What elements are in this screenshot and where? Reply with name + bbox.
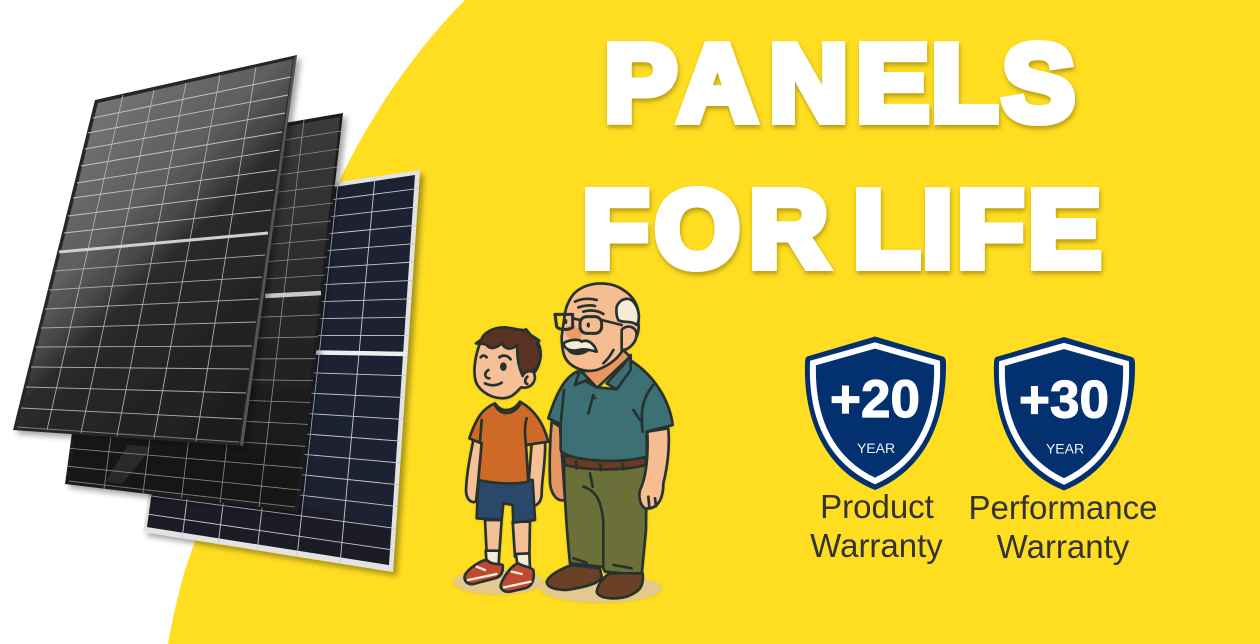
boy xyxy=(465,327,548,592)
label: Product Warranty xyxy=(810,488,943,564)
label: Performance Warranty: Warranty xyxy=(997,528,1130,565)
shield caption: YEAR xyxy=(857,440,895,456)
solar panels stack xyxy=(13,55,420,572)
label: Performance Warranty xyxy=(969,489,1157,565)
title line: PANELS: PANELS xyxy=(604,22,1075,144)
badge: +20 year product warranty shield xyxy=(805,336,946,490)
badge: +30 year performance warranty shield xyxy=(994,337,1135,490)
shield number: +30 xyxy=(1019,370,1109,430)
ground shadow xyxy=(453,569,661,602)
title line: FOR LIFE: FOR LIFE xyxy=(582,168,1101,290)
label: Product Warranty: Product xyxy=(820,488,934,525)
shield number: +20 xyxy=(830,370,920,429)
label: Product Warranty: Warranty xyxy=(810,527,943,564)
panel: rear silver-framed solar panel xyxy=(143,170,420,572)
grandfather xyxy=(547,283,673,598)
title xyxy=(582,22,1101,290)
panel: middle black solar panel xyxy=(65,113,343,512)
shield caption: YEAR xyxy=(1046,440,1084,456)
label: Performance Warranty: Performance xyxy=(969,489,1157,526)
panel: front dark solar panel xyxy=(13,55,297,446)
illustration: boy and grandfather xyxy=(453,283,673,602)
